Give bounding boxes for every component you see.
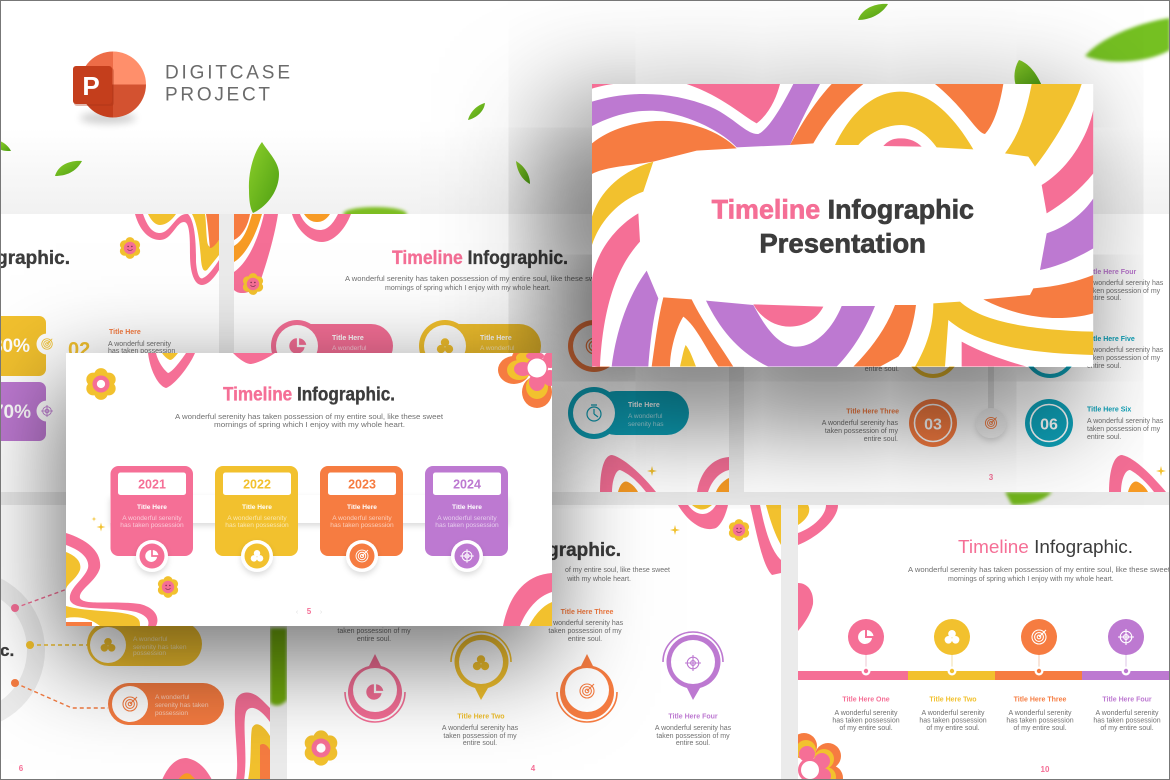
nodes [11, 604, 34, 687]
text: six: Title Here Six [1087, 406, 1131, 414]
text: five [1087, 336, 1164, 370]
shadow: featured slide [66, 353, 552, 626]
text: stage four: has taken possession [1093, 718, 1161, 724]
text: stage two: of my entire soul. [926, 725, 980, 732]
text: three: taken possession of my [548, 628, 622, 635]
text: stage three: Title Here Three [1014, 696, 1066, 704]
squiggle decoration [678, 505, 781, 575]
text: five: A wonderful serenity has [1087, 347, 1164, 354]
icon: flower [305, 730, 337, 766]
page number: 10 [1041, 765, 1050, 774]
pill: yellow: Title Here [480, 335, 512, 342]
leaf: top [858, 4, 888, 20]
subtitle: mornings of spring which I enjoy with my whole heart. [214, 422, 405, 429]
text: three: A wonderful serenity has [547, 620, 624, 627]
subtitle [345, 276, 605, 292]
flower top right [498, 349, 557, 408]
heading fragment: graphic. [547, 540, 621, 561]
card: 2024: A wonderful serenity [437, 515, 497, 522]
pin: orange [557, 654, 617, 722]
text: three: A wonderful serenity has [822, 420, 898, 427]
text: stage one: Title Here One [842, 696, 890, 704]
sparkles [92, 516, 106, 532]
heading: Timeline Infographic. [223, 384, 395, 406]
text: one fragment: entire soul. [357, 636, 391, 643]
pill: orange: serenity has taken [155, 702, 209, 709]
card: 2023: A wonderful serenity [332, 515, 392, 522]
leaf: small centre [468, 103, 485, 120]
text: one fragment [337, 628, 411, 643]
leaf: small left [55, 161, 82, 176]
slide: left percentages [0, 214, 219, 492]
cover title [712, 194, 974, 258]
text: six: taken possession of my [1087, 426, 1161, 433]
text: stage four: A wonderful serenity [1095, 710, 1159, 717]
pill: teal: serenity has [628, 421, 664, 428]
icon: smiley flower [729, 519, 749, 541]
text: four: taken possession of my [1087, 288, 1161, 295]
card: 2022: A wonderful serenity [227, 515, 287, 522]
text: two: Title Here Two [457, 714, 505, 720]
pin: yellow [451, 632, 511, 700]
icon: smiley flower [158, 576, 178, 598]
card: 2021: 2021 [138, 478, 166, 492]
pin: purple [663, 632, 723, 700]
slide: pins [287, 505, 781, 780]
text: four [1093, 268, 1163, 300]
slide: radial [0, 505, 270, 780]
text: four [655, 714, 732, 747]
leaf: blurred behind slide [343, 207, 407, 221]
text: six: entire soul. [1087, 434, 1121, 441]
text: stage three [1006, 696, 1074, 732]
squiggle top [148, 353, 275, 388]
rainbow decorations [600, 455, 729, 492]
leaf: large [249, 142, 279, 213]
text: stage three: A wonderful serenity [1008, 710, 1072, 717]
dashed connectors [15, 588, 108, 708]
pill: pink: Title Here [332, 335, 364, 342]
page number: ‹ [296, 609, 299, 616]
text: stage two: Title Here Two [929, 696, 977, 704]
text: four: Title Here Four [1087, 269, 1137, 276]
icon: smiley flower [243, 273, 263, 295]
text: five: taken possession of my [1087, 355, 1161, 362]
squiggle bottom left [66, 533, 157, 626]
logo: PowerPoint: P [82, 71, 100, 101]
rainbow decoration [1109, 455, 1166, 492]
pill: pink [271, 320, 393, 353]
squiggle decoration [162, 692, 270, 780]
text: stage three: has taken possession [1006, 718, 1074, 724]
text: two [442, 714, 519, 747]
leaf: behind cover [1014, 60, 1042, 86]
text: stage two: A wonderful serenity [921, 710, 985, 717]
pill: teal [568, 387, 689, 439]
text: three: entire soul. [568, 636, 602, 643]
brand text [165, 62, 290, 106]
sparkle [1156, 466, 1166, 476]
text: stage three: of my entire soul. [1013, 725, 1067, 732]
circle 06: 06 [1040, 416, 1058, 434]
card: 2024 [425, 466, 508, 572]
text: five: Title Here Five [1087, 336, 1135, 343]
pin: pink [345, 654, 405, 722]
pill: yellow [419, 320, 541, 353]
card: 2024: 2024 [453, 478, 481, 492]
squiggle decoration [234, 214, 351, 293]
text: title here [108, 329, 175, 355]
card: 2023: has taken possession [330, 522, 394, 529]
text: two: entire soul. [463, 740, 497, 747]
pill: yellow: A wonderful [133, 636, 168, 643]
stage three marker [1021, 619, 1057, 676]
text: stage four: of my entire soul. [1100, 725, 1154, 732]
brand text: PROJECT [165, 84, 270, 106]
icon: smiley flower [120, 237, 140, 259]
card: 2021: has taken possession [120, 522, 184, 529]
slide: pills [234, 214, 729, 492]
icon: flower [86, 368, 116, 400]
stage four marker [1108, 619, 1144, 676]
pill: yellow: serenity has taken [133, 644, 187, 651]
pill: teal: Title Here [628, 402, 660, 409]
subtitle [908, 567, 1170, 583]
text: six [1087, 406, 1164, 441]
leaf: gutter between slides [270, 628, 287, 706]
card: 2022: has taken possession [225, 522, 289, 529]
leaf: top right blurred [1085, 18, 1170, 62]
flower decoration [791, 733, 843, 780]
subtitle: A wonderful serenity has taken possession of my entire soul, like these sweet [345, 276, 605, 283]
rainbow bottom right [503, 573, 552, 626]
subtitle fragment: with my whole heart. [566, 576, 631, 583]
panel: cover slide [592, 84, 1093, 367]
subtitle: A wonderful serenity has taken possession of my entire soul, like these sweet [908, 567, 1170, 574]
text: three: Title Here Three [846, 408, 899, 416]
text: four: A wonderful serenity has [655, 725, 732, 732]
text: three: Title Here Three [561, 609, 613, 616]
text: four: taken possession of my [656, 733, 730, 740]
text: four: entire soul. [1087, 295, 1121, 302]
card: 2021: Title Here [137, 504, 167, 511]
sparkle [647, 466, 657, 476]
logo: PowerPoint [73, 52, 146, 124]
white band [110, 495, 508, 523]
cover title: Timeline Infographic [712, 194, 974, 224]
subtitle fragment [565, 567, 670, 583]
stem [988, 366, 994, 408]
timeline bar [798, 671, 1170, 680]
card: 2023: Title Here [347, 504, 377, 511]
sparkle [670, 525, 680, 535]
text: three [547, 609, 624, 643]
text: six: A wonderful serenity has [1087, 418, 1164, 425]
pill: teal: A wonderful [628, 413, 663, 420]
text: stage two: has taken possession [919, 718, 987, 724]
subtitle: mornings of spring which I enjoy with my whole heart. [385, 285, 551, 292]
panel: featured slide [66, 349, 557, 626]
pill: orange [568, 320, 610, 372]
pill: orange: A wonderful [155, 694, 190, 701]
circle 06 [1025, 399, 1073, 447]
stage one marker [848, 619, 884, 676]
heading: Timeline Infographic. [392, 248, 568, 269]
text: stage two [919, 696, 987, 732]
radial rings [1, 578, 45, 722]
brand text: DIGITCASE [165, 62, 290, 84]
card: 2022: Title Here [242, 504, 272, 511]
squiggle decoration [135, 214, 219, 285]
text: stage one [832, 696, 900, 732]
pill: yellow: A wonderful [480, 345, 515, 352]
page number: 3 [989, 473, 994, 482]
text: title here: A wonderful serenity [108, 341, 172, 348]
text: three: entire soul. [864, 436, 898, 443]
circle 03: 03 [924, 416, 942, 434]
text: five: entire soul. [1087, 363, 1121, 370]
text: four: entire soul. [676, 740, 710, 747]
leaf: right of centre [516, 161, 530, 184]
text: two: A wonderful serenity has [442, 725, 519, 732]
text: title here: has taken possession [108, 348, 175, 355]
leaf: lower gutter [1005, 492, 1052, 505]
slide: horizontal timeline [791, 505, 1170, 780]
pill: yellow [87, 622, 202, 666]
text: title here: Title Here [109, 329, 141, 336]
shadow: cover slide [592, 84, 1093, 367]
70 percent card [0, 382, 58, 441]
text: stage four: Title Here Four [1102, 696, 1152, 704]
card: 2022 [215, 466, 298, 572]
subtitle: A wonderful serenity has taken possession of my entire soul, like these sweet [175, 414, 443, 421]
card: 2024: Title Here [452, 504, 482, 511]
number 02: 02 [68, 339, 90, 361]
page number: › [320, 609, 323, 616]
card: 2021: A wonderful serenity [122, 515, 182, 522]
text: stage one: A wonderful serenity [834, 710, 898, 717]
card: 2021 [110, 466, 193, 572]
hidden circle row: entire soul. [865, 366, 899, 373]
stage two marker [934, 619, 970, 676]
hidden circle row [865, 366, 1072, 378]
subtitle [175, 414, 443, 429]
text: stage one: has taken possession [832, 718, 900, 724]
card: 2024: has taken possession [435, 522, 499, 529]
page number: 4 [531, 764, 536, 773]
card: 2023: 2023 [348, 478, 376, 492]
page number: 6 [19, 764, 24, 773]
text: stage one: of my entire soul. [839, 725, 893, 732]
subtitle: mornings of spring which I enjoy with my whole heart. [948, 576, 1114, 583]
text: four: Title Here Four [668, 714, 718, 720]
text: stage four [1093, 696, 1161, 732]
pill: yellow: possession [133, 650, 166, 657]
heading: Timeline Infographic. [958, 537, 1133, 557]
heading fragment: c. [0, 641, 14, 660]
circle 03 [909, 399, 957, 447]
leaf: left edge [0, 141, 11, 151]
text: four: A wonderful serenity has [1087, 280, 1164, 287]
centre icon [976, 408, 1006, 438]
text: three: taken possession of my [825, 428, 898, 435]
text: one fragment: taken possession of my [337, 628, 411, 635]
subtitle fragment: of my entire soul, like these sweet [565, 567, 670, 574]
text: three [822, 408, 899, 443]
page number: 5 [307, 607, 312, 616]
pill: pink: A wonderful [332, 345, 367, 352]
pill: orange: possession [155, 710, 188, 717]
page number [296, 607, 323, 616]
text: two: taken possession of my [443, 733, 517, 740]
pill: orange [108, 683, 224, 725]
card: 2022: 2022 [243, 478, 271, 492]
slide: numbered circles [744, 214, 1170, 492]
top left decoration [798, 505, 838, 631]
card: 2023 [320, 466, 403, 572]
cover title: Presentation [759, 228, 926, 258]
80 percent card [0, 316, 58, 376]
